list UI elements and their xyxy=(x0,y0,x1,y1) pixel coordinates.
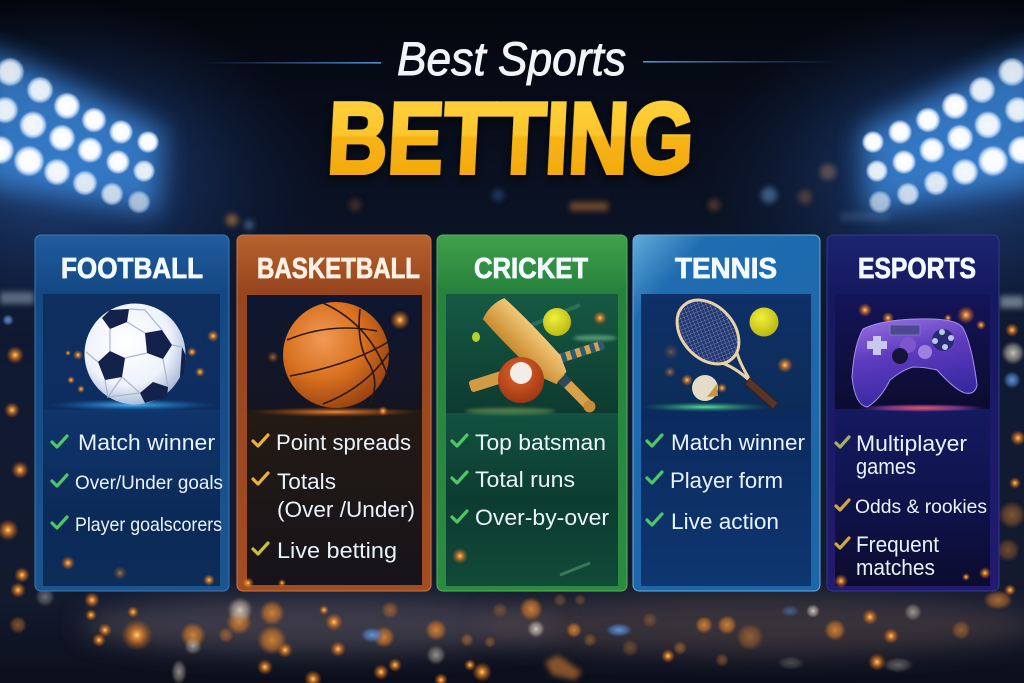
label: live action: Live action xyxy=(671,509,779,534)
title line: Best Sports: Best Sports xyxy=(397,32,626,85)
check: match winner xyxy=(52,436,67,447)
check: total runs xyxy=(452,472,467,483)
floor glow xyxy=(251,407,419,417)
check: live betting xyxy=(253,543,268,554)
check: odds and rookies xyxy=(836,500,849,510)
label: frequent matches: matches xyxy=(856,555,935,580)
heading: esports: ESPORTS xyxy=(858,253,976,285)
label: player goalscorers: Player goalscorers xyxy=(75,514,222,536)
label: top batsman: Top batsman xyxy=(475,430,606,455)
label: over/under goals: Over/Under goals xyxy=(75,472,223,494)
label: over-by-over: Over-by-over xyxy=(475,505,609,530)
panel: cricket xyxy=(437,235,627,591)
label: odds and rookies: Odds & rookies xyxy=(855,496,987,518)
label: frequent matches: Frequent xyxy=(856,532,939,557)
title line: BETTING: BETTING xyxy=(325,83,697,195)
icon: tennis racket and balls xyxy=(665,288,778,409)
check: live action xyxy=(647,514,662,525)
check: over-by-over xyxy=(452,511,467,522)
label: multiplayer games: Multiplayer xyxy=(856,431,967,456)
label: live betting: Live betting xyxy=(277,538,397,563)
check: multiplayer games xyxy=(836,437,849,447)
label: match winner: Match winner xyxy=(78,430,215,455)
title xyxy=(200,32,840,195)
label: totals over/under: Totals xyxy=(277,469,336,494)
label: point spreads: Point spreads xyxy=(276,430,411,455)
check: over/under goals xyxy=(52,475,67,486)
heading: tennis: TENNIS xyxy=(675,253,777,285)
label: multiplayer games: games xyxy=(856,454,916,479)
icon: soccer ball xyxy=(84,304,186,404)
label: total runs: Total runs xyxy=(475,467,575,492)
bokeh lights xyxy=(0,314,1024,683)
heading: football: FOOTBALL xyxy=(61,253,203,285)
icon: cricket bats and ball xyxy=(468,295,605,422)
icon: basketball xyxy=(283,302,389,408)
panel: esports xyxy=(827,235,999,591)
label: multiplayer games xyxy=(856,431,967,479)
second bat xyxy=(468,339,605,393)
panel: tennis xyxy=(633,235,820,591)
label: totals over/under: (Over /Under) xyxy=(277,497,415,522)
icon: game controller xyxy=(852,319,977,407)
heading: basketball: BASKETBALL xyxy=(257,253,420,285)
right stadium floodlights xyxy=(860,45,1024,215)
floor glow xyxy=(48,399,216,411)
panel: football xyxy=(35,235,229,591)
label: player form: Player form xyxy=(670,468,783,493)
label: match winner: Match winner xyxy=(671,430,805,455)
main bat xyxy=(480,295,605,422)
floor glow xyxy=(857,404,987,412)
label: totals over/under xyxy=(277,469,415,522)
check: frequent matches xyxy=(836,538,849,548)
label: frequent matches xyxy=(856,532,939,580)
panel: basketball xyxy=(237,235,431,591)
check: player form xyxy=(647,472,662,483)
check: match winner xyxy=(647,435,662,446)
check: player goalscorers xyxy=(52,517,67,528)
floor glow xyxy=(640,402,770,412)
left stadium floodlights xyxy=(0,45,165,215)
floor glow xyxy=(465,408,555,414)
check: totals xyxy=(253,473,268,484)
check: point spreads xyxy=(253,435,268,446)
heading: cricket: CRICKET xyxy=(474,253,588,285)
check: top batsman xyxy=(452,435,467,446)
